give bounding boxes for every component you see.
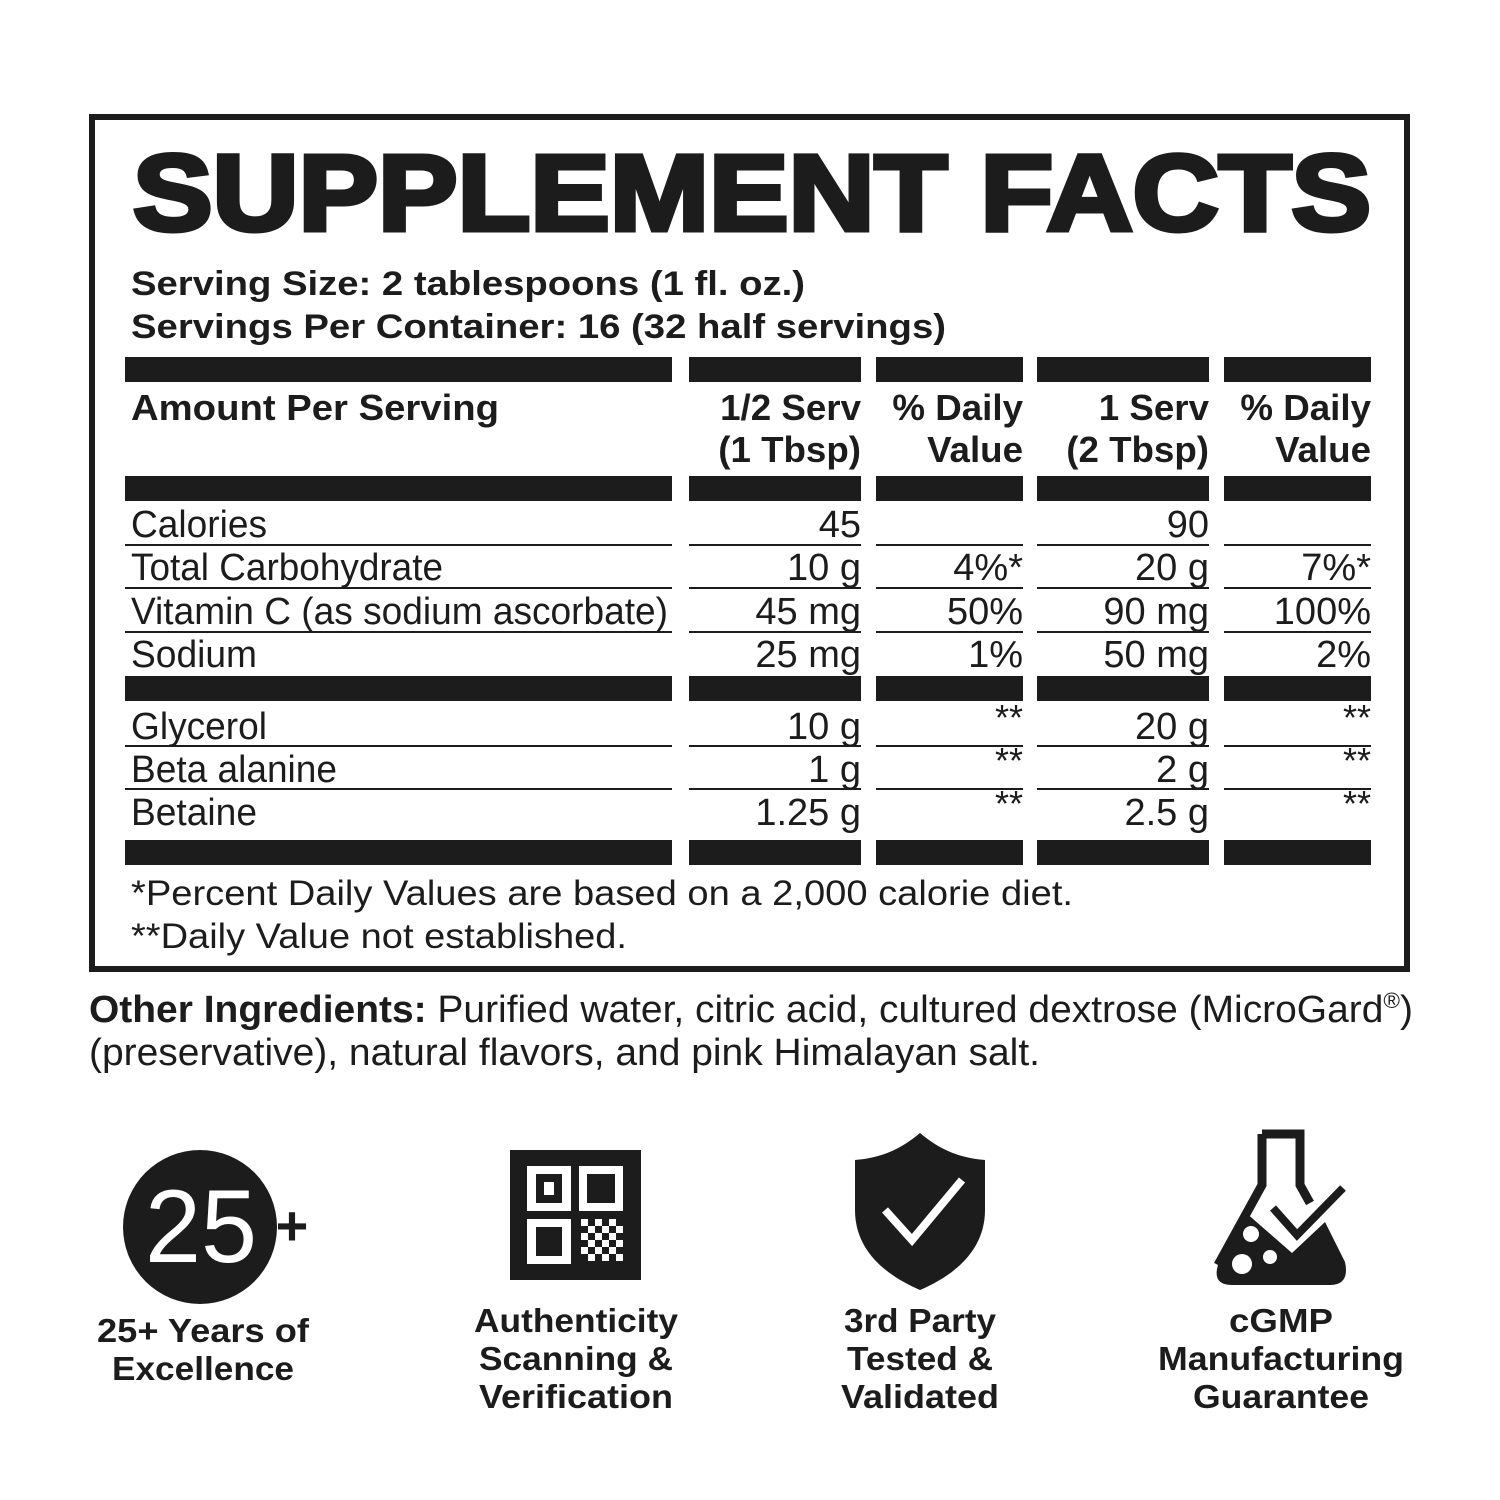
table rows: 90 [1167, 504, 1209, 546]
table rows: ** [995, 697, 1023, 738]
table rows: Vitamin C (as sodium ascorbate) [131, 591, 668, 633]
table header: (1 Tbsp) [718, 429, 861, 470]
label: 25+ years: Excellence [112, 1350, 294, 1387]
label: cGMP: Manufacturing [1158, 1340, 1404, 1377]
table rows: 90 mg [1103, 591, 1209, 633]
table rows [131, 504, 1371, 834]
label: cGMP: Guarantee [1193, 1378, 1369, 1415]
footnotes [131, 874, 1073, 956]
icon: shield [855, 1133, 985, 1290]
table bars [125, 357, 1371, 865]
table header [131, 387, 1372, 470]
table rows: Total Carbohydrate [131, 547, 443, 589]
table rows: 50% [947, 591, 1023, 633]
table rows: Calories [131, 504, 267, 546]
table rows: Glycerol [131, 706, 267, 748]
table rows: 7%* [1301, 547, 1371, 589]
label: 25+ years: 25+ Years of [97, 1312, 310, 1349]
table rows: 10 g [787, 706, 861, 748]
other ingredients: ® [1383, 988, 1400, 1013]
table rows: 20 g [1135, 547, 1209, 589]
label: 3rd party: 3rd Party [844, 1302, 997, 1339]
table rows: Beta alanine [131, 749, 337, 791]
icon: flask [1217, 1134, 1346, 1285]
label: authenticity: Scanning & [479, 1340, 673, 1377]
table rows: 50 mg [1103, 634, 1209, 676]
table rows: 45 [819, 504, 861, 546]
label: authenticity: Authenticity [474, 1302, 679, 1339]
table rows: Betaine [131, 792, 257, 834]
table rows: ** [995, 783, 1023, 824]
table header: Amount Per Serving [131, 387, 499, 428]
table rows: 1.25 g [755, 792, 861, 834]
table header: % Daily [892, 387, 1024, 428]
panel: supplement facts box [92, 117, 1407, 969]
icon: 25+ years: + [276, 1194, 308, 1257]
label: authenticity: Verification [479, 1378, 673, 1415]
table rows: ** [1343, 740, 1371, 781]
label: 25+ years [97, 1312, 310, 1387]
label: cGMP [1158, 1302, 1404, 1415]
table header: (2 Tbsp) [1066, 429, 1209, 470]
label: cGMP: cGMP [1229, 1302, 1333, 1339]
table header: Value [1275, 429, 1371, 470]
table rows: 4%* [953, 547, 1023, 589]
other ingredients: ) [1400, 989, 1413, 1031]
other ingredients: Other Ingredients: Purified water, citric acid, cultured dextrose (MicroGard [89, 989, 1360, 1031]
table rows: 2% [1316, 634, 1371, 676]
serving info: Serving Size: 2 tablespoons (1 fl. oz.) [131, 265, 805, 303]
icon: QR code [510, 1150, 641, 1280]
table header: % Daily [1240, 387, 1372, 428]
icon: 25+ years: 25 [145, 1169, 257, 1285]
table rows: 1 g [808, 749, 861, 791]
serving info: Servings Per Container: 16 (32 half servings) [131, 308, 946, 346]
serving info [131, 265, 946, 346]
title: SUPPLEMENT FACTS [133, 132, 1371, 253]
table rows: 20 g [1135, 706, 1209, 748]
other ingredients: (preservative), natural flavors, and pink Himalayan salt. [89, 1032, 1040, 1074]
other ingredients [89, 988, 1413, 1074]
table rows: ** [995, 740, 1023, 781]
label: 3rd party: Tested & [847, 1340, 993, 1377]
table rows: 10 g [787, 547, 861, 589]
footnotes: **Daily Value not established. [131, 917, 627, 956]
table rows: 45 mg [755, 591, 861, 633]
label: authenticity [474, 1302, 679, 1415]
table header: Value [927, 429, 1023, 470]
table rows: 2 g [1156, 749, 1209, 791]
table rows: 100% [1274, 591, 1371, 633]
table header: 1 Serv [1099, 387, 1210, 428]
table rows: ** [1343, 783, 1371, 824]
icon: 25+ years [123, 1150, 308, 1304]
label: 3rd party [841, 1302, 999, 1415]
table rows: 25 mg [755, 634, 861, 676]
label: 3rd party: Validated [841, 1378, 999, 1415]
table rows: ** [1343, 697, 1371, 738]
table header: 1/2 Serv [720, 387, 862, 428]
table rows: 2.5 g [1124, 792, 1209, 834]
table rows: 1% [968, 634, 1023, 676]
table rows: Sodium [131, 634, 257, 676]
footnotes: *Percent Daily Values are based on a 2,000 calorie diet. [131, 874, 1073, 913]
